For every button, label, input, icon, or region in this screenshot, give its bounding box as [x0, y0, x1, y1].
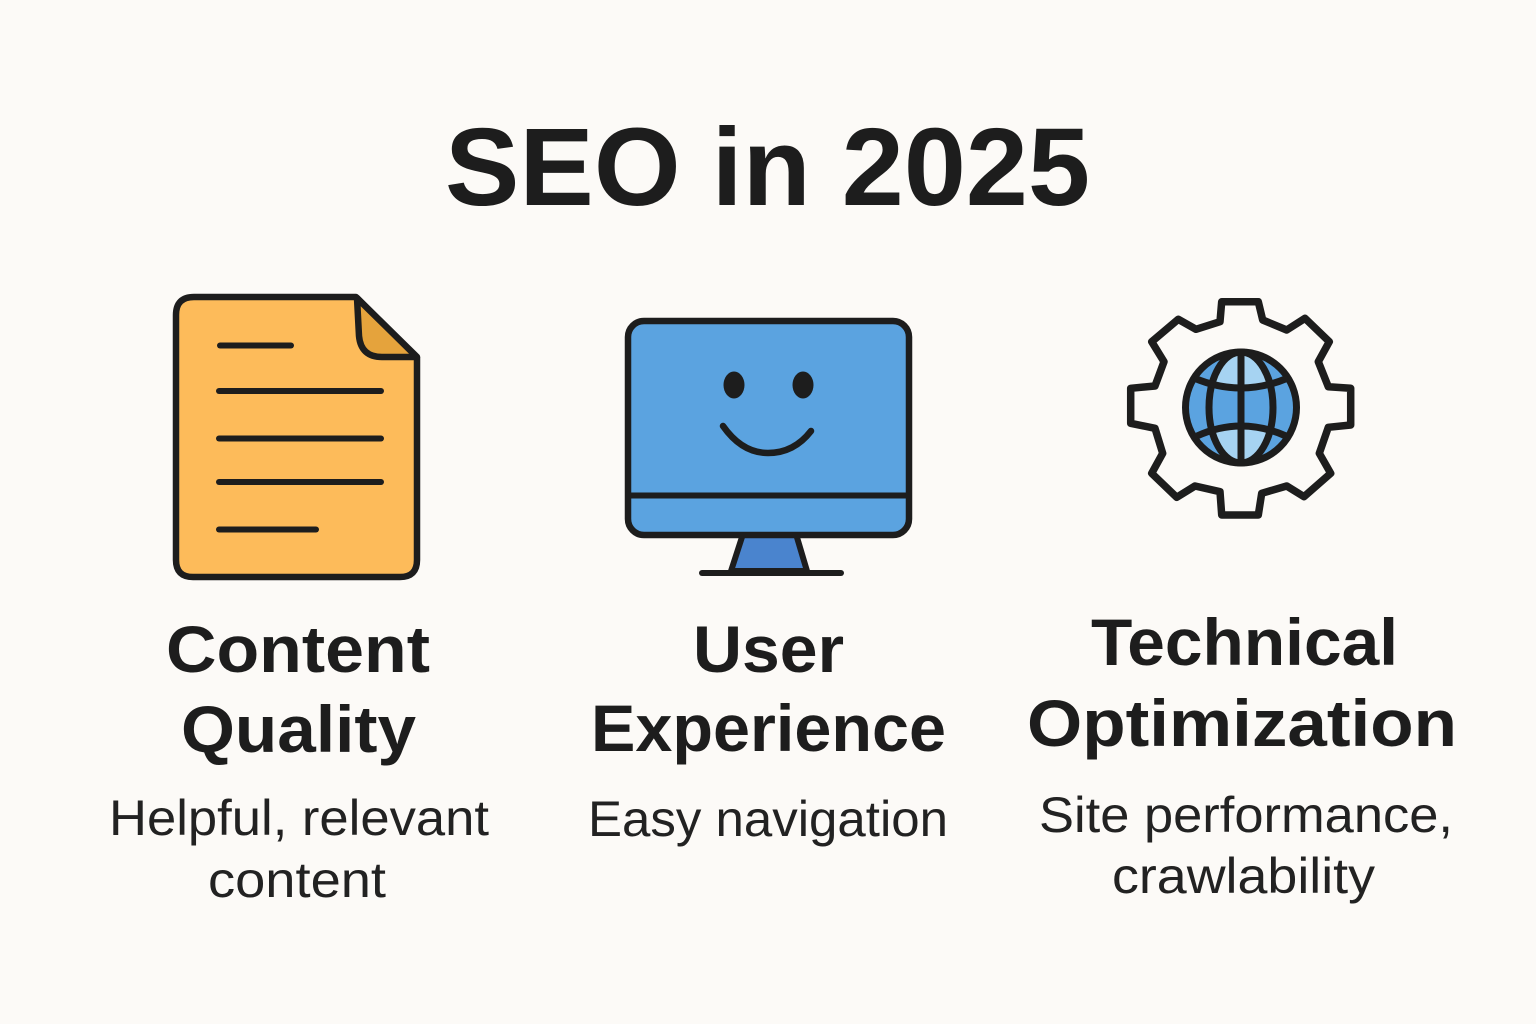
heading: technical optimization	[1027, 605, 1457, 760]
heading: content quality: Quality	[181, 692, 416, 766]
title: SEO in 2025	[445, 106, 1090, 229]
heading: user experience: User	[693, 612, 844, 686]
panel: user experience	[588, 321, 948, 847]
description: user experience: Easy navigation	[588, 791, 948, 847]
heading: user experience	[591, 612, 946, 765]
heading: technical optimization: Technical	[1091, 605, 1398, 679]
description: content quality: content	[208, 852, 386, 908]
description: technical optimization: Site performance,	[1039, 787, 1453, 843]
heading: technical optimization: Optimization	[1027, 686, 1457, 760]
icon: document	[176, 297, 417, 577]
heading: content quality: Content	[166, 612, 430, 686]
description: content quality: Helpful, relevant	[109, 790, 489, 846]
panel: technical optimization	[1027, 302, 1457, 904]
icon: smiling monitor	[628, 321, 909, 573]
description: content quality	[109, 790, 489, 908]
heading: user experience: Experience	[591, 691, 946, 765]
icon: gear with globe	[1131, 302, 1351, 515]
panel: content quality	[109, 297, 489, 908]
heading: content quality	[166, 612, 430, 766]
description: technical optimization	[1039, 787, 1453, 904]
description: technical optimization: crawlability	[1112, 848, 1375, 904]
